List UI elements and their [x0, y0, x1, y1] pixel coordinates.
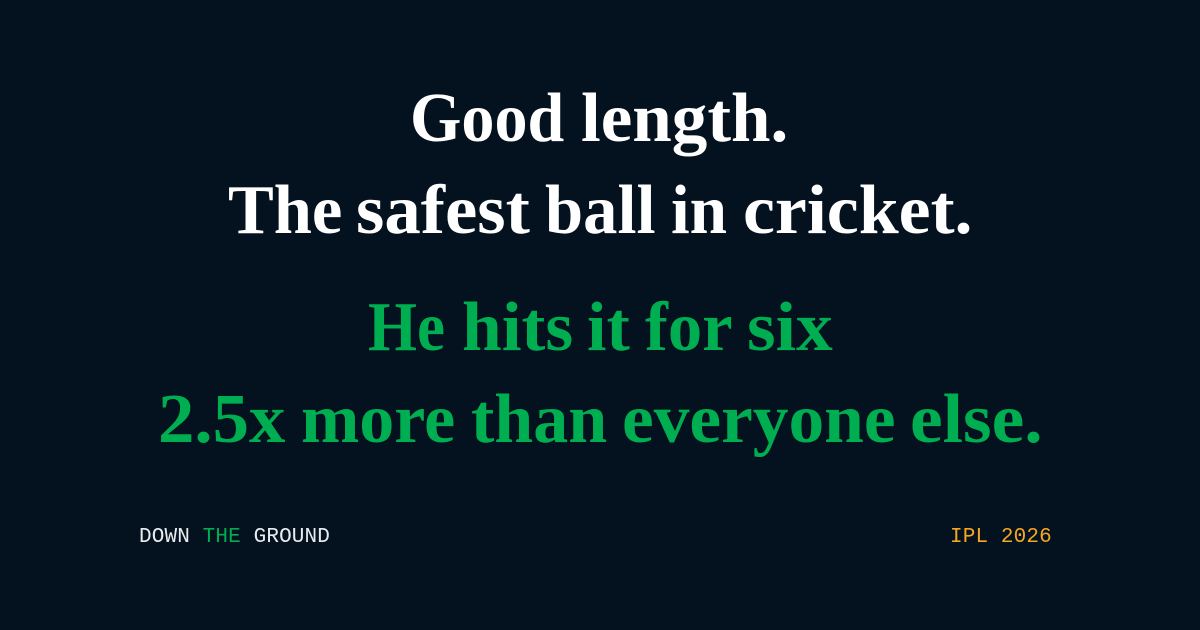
headline: white: ball — [545, 172, 656, 249]
headline: green: He — [368, 289, 445, 366]
headline: green: else. — [910, 381, 1043, 458]
headline: green — [158, 289, 1043, 458]
headline: green: than — [471, 381, 607, 458]
headline: white: cricket. — [743, 172, 973, 249]
headline: white — [228, 80, 973, 249]
headline: white: Good — [410, 80, 564, 157]
headline: green: six — [747, 289, 833, 366]
headline: green: 2.5x — [158, 381, 285, 458]
headline: white: The — [228, 172, 342, 249]
headline: green: more — [301, 381, 455, 458]
headline: green: it — [587, 289, 630, 366]
headline: white: length. — [581, 80, 788, 157]
tag: IPL 2026: IPL 2026 — [950, 526, 1052, 549]
headline: white: safest — [356, 172, 530, 249]
headline: green: hits — [462, 289, 573, 366]
headline: white: in — [671, 172, 727, 249]
brand wordmark: DOWN THE GROUND — [139, 526, 330, 549]
headline: green: everyone — [622, 381, 896, 458]
headline: green: for — [645, 289, 733, 366]
